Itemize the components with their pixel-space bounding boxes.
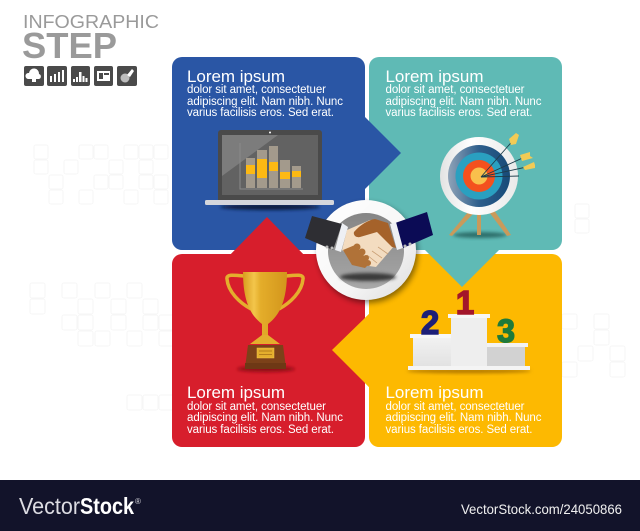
icon row bbox=[24, 66, 137, 86]
left sleeve bbox=[305, 216, 342, 250]
text block: teal panel: Lorem ipsum bbox=[386, 67, 484, 86]
panel: teal bbox=[369, 57, 562, 287]
title: INFOGRAPHIC: INFOGRAPHIC bbox=[23, 11, 159, 32]
text block: red panel: dolor sit amet, consectetuer bbox=[187, 401, 326, 413]
icon: medal tool bbox=[117, 66, 137, 86]
icon: trophy bbox=[227, 272, 303, 372]
icon: growth chart bbox=[47, 66, 67, 86]
registered mark: ® bbox=[135, 497, 141, 506]
text block: blue panel: dolor sit amet, consectetuer bbox=[187, 84, 326, 96]
center badge: handshake bbox=[305, 200, 433, 303]
footer bar bbox=[0, 480, 640, 531]
text block: yellow panel: adipiscing elit. Nam nibh. Nunc bbox=[386, 412, 542, 424]
lower brown hand bbox=[343, 245, 370, 268]
text block: yellow panel bbox=[386, 383, 542, 436]
image id: VectorStock.com/24050866 bbox=[461, 501, 622, 517]
light hand bbox=[342, 220, 395, 267]
text block: teal panel: varius facilisis eros. Sed erat. bbox=[386, 107, 532, 119]
number 1: 1 bbox=[456, 284, 474, 321]
text block: red panel bbox=[187, 383, 343, 436]
text block: blue panel bbox=[187, 67, 343, 119]
panel: yellow bbox=[332, 254, 562, 447]
text block: teal panel: dolor sit amet, consectetuer bbox=[386, 84, 525, 96]
text block: red panel: Lorem ipsum bbox=[187, 383, 285, 402]
text block: blue panel: Lorem ipsum bbox=[187, 67, 285, 86]
upper brown hand bbox=[354, 219, 396, 248]
icon: target with arrows bbox=[440, 133, 535, 238]
cuffs bbox=[335, 222, 403, 252]
text block: yellow panel: Lorem ipsum bbox=[386, 383, 484, 402]
red arrow tip over blue bbox=[231, 217, 303, 254]
text block: blue panel: varius facilisis eros. Sed erat. bbox=[187, 107, 334, 119]
panel: blue bbox=[172, 57, 401, 250]
background square pattern bbox=[30, 145, 625, 410]
number 2: 2 bbox=[421, 304, 439, 341]
text block: teal panel: adipiscing elit. Nam nibh. Nunc bbox=[386, 96, 542, 108]
icon: bar graph bbox=[71, 66, 90, 86]
brand logo: Stock: Stock bbox=[80, 493, 134, 519]
text block: blue panel: adipiscing elit. Nam nibh. Nunc bbox=[187, 96, 343, 108]
text block: yellow panel: varius facilisis eros. Sed erat. bbox=[386, 424, 532, 436]
panel: red bbox=[172, 217, 365, 447]
icon: presentation board bbox=[94, 66, 113, 86]
number 3: 3 bbox=[497, 313, 515, 349]
yellow arrow tip over red bbox=[332, 314, 369, 387]
text block: red panel: adipiscing elit. Nam nibh. Nunc bbox=[187, 412, 343, 424]
text block: teal panel bbox=[386, 67, 542, 119]
header: title and icon row bbox=[22, 11, 159, 86]
icon: winners podium bbox=[407, 284, 531, 374]
icon: cloud upload bbox=[24, 66, 44, 86]
text block: yellow panel: dolor sit amet, consectetuer bbox=[386, 401, 525, 413]
right sleeve bbox=[395, 212, 433, 248]
brand logo: Vector: Vector bbox=[19, 493, 80, 519]
icon: laptop with bar chart bbox=[205, 130, 334, 210]
text block: red panel: varius facilisis eros. Sed erat. bbox=[187, 424, 334, 436]
title: STEP: STEP bbox=[22, 25, 117, 66]
